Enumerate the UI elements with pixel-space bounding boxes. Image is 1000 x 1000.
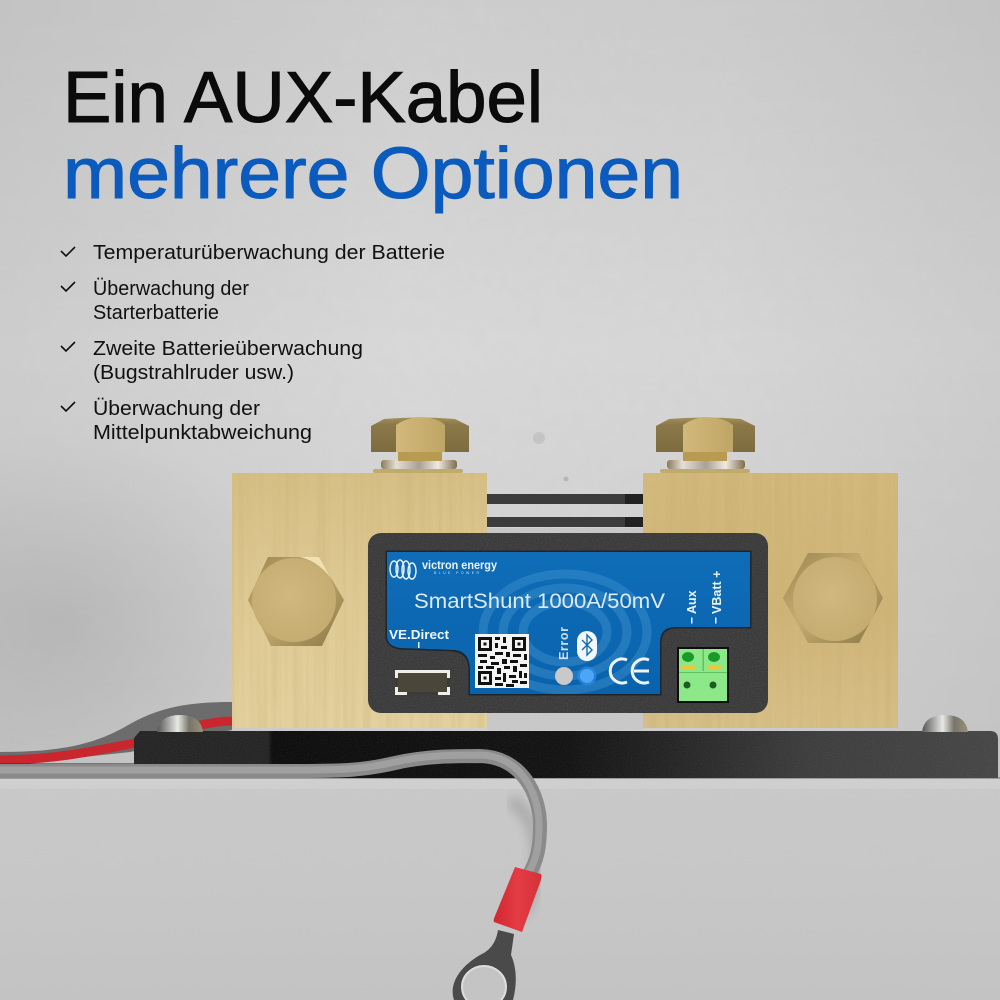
title: mehrere Optionen [63,134,683,214]
error LED [555,667,573,685]
concrete ledge [0,777,1000,1000]
left brass block [232,473,487,728]
victron energy logo: victron energy [422,560,498,572]
Error label: Error [557,627,571,660]
resistor bars [487,494,643,527]
red crimp sleeve [494,867,542,932]
victron energy logo: BLUE POWER [434,571,479,575]
check item: Starterbatterie: Überwachung der [93,278,249,300]
check item: zweite Batterie [61,338,363,384]
CE mark [610,659,649,683]
dark control housing [368,533,768,713]
product name: SmartShunt 1000A/50mV [414,590,665,613]
VE.Direct label: VE.Direct [389,628,450,642]
Aux label: Aux [685,590,699,614]
check item: Starterbatterie: Starterbatterie [93,302,219,324]
gap under the housing [487,528,643,730]
right top nut [656,418,755,473]
check item: Mittelpunktabweichung [61,398,312,444]
rear wires [0,702,232,766]
check item: zweite Batterie: (Bugstrahlruder usw.) [93,362,294,384]
check item: Temperaturüberwachung: Temperaturüberwachung der Batterie [93,242,445,264]
left hex bolt [248,557,344,646]
green terminal block [677,647,729,703]
title: Ein AUX-Kabel [63,58,543,138]
black wire [0,764,135,766]
VBatt label: VBatt + [710,571,724,614]
feature checklist [61,242,445,444]
cable shadow on ledge [510,800,538,915]
bluetooth icon [577,631,597,661]
grey AUX cable [0,755,540,876]
check item: Mittelpunktabweichung: Überwachung der [93,398,260,420]
ring terminal [453,930,516,1000]
shunt device [134,418,998,778]
VE.Direct label [389,628,450,648]
left top nut [371,418,469,473]
left ball screw [157,715,203,732]
bluetooth watermark [483,574,647,690]
black mounting base [134,731,998,778]
QR code [475,634,529,688]
blue status LED [578,666,596,686]
rear grey wire [0,702,232,766]
check item: zweite Batterie: Zweite Batterieüberwachung [93,338,363,360]
right ball screw [922,715,968,732]
right hex bolt [783,553,883,643]
check item: Starterbatterie [61,278,249,324]
check item: Mittelpunktabweichung: Mittelpunktabweichung [93,422,312,444]
blue label panel [386,550,752,696]
victron energy logo [390,560,498,579]
title [63,58,683,214]
right brass block [643,473,898,728]
VE.Direct port [395,670,450,695]
red wire [0,721,232,760]
